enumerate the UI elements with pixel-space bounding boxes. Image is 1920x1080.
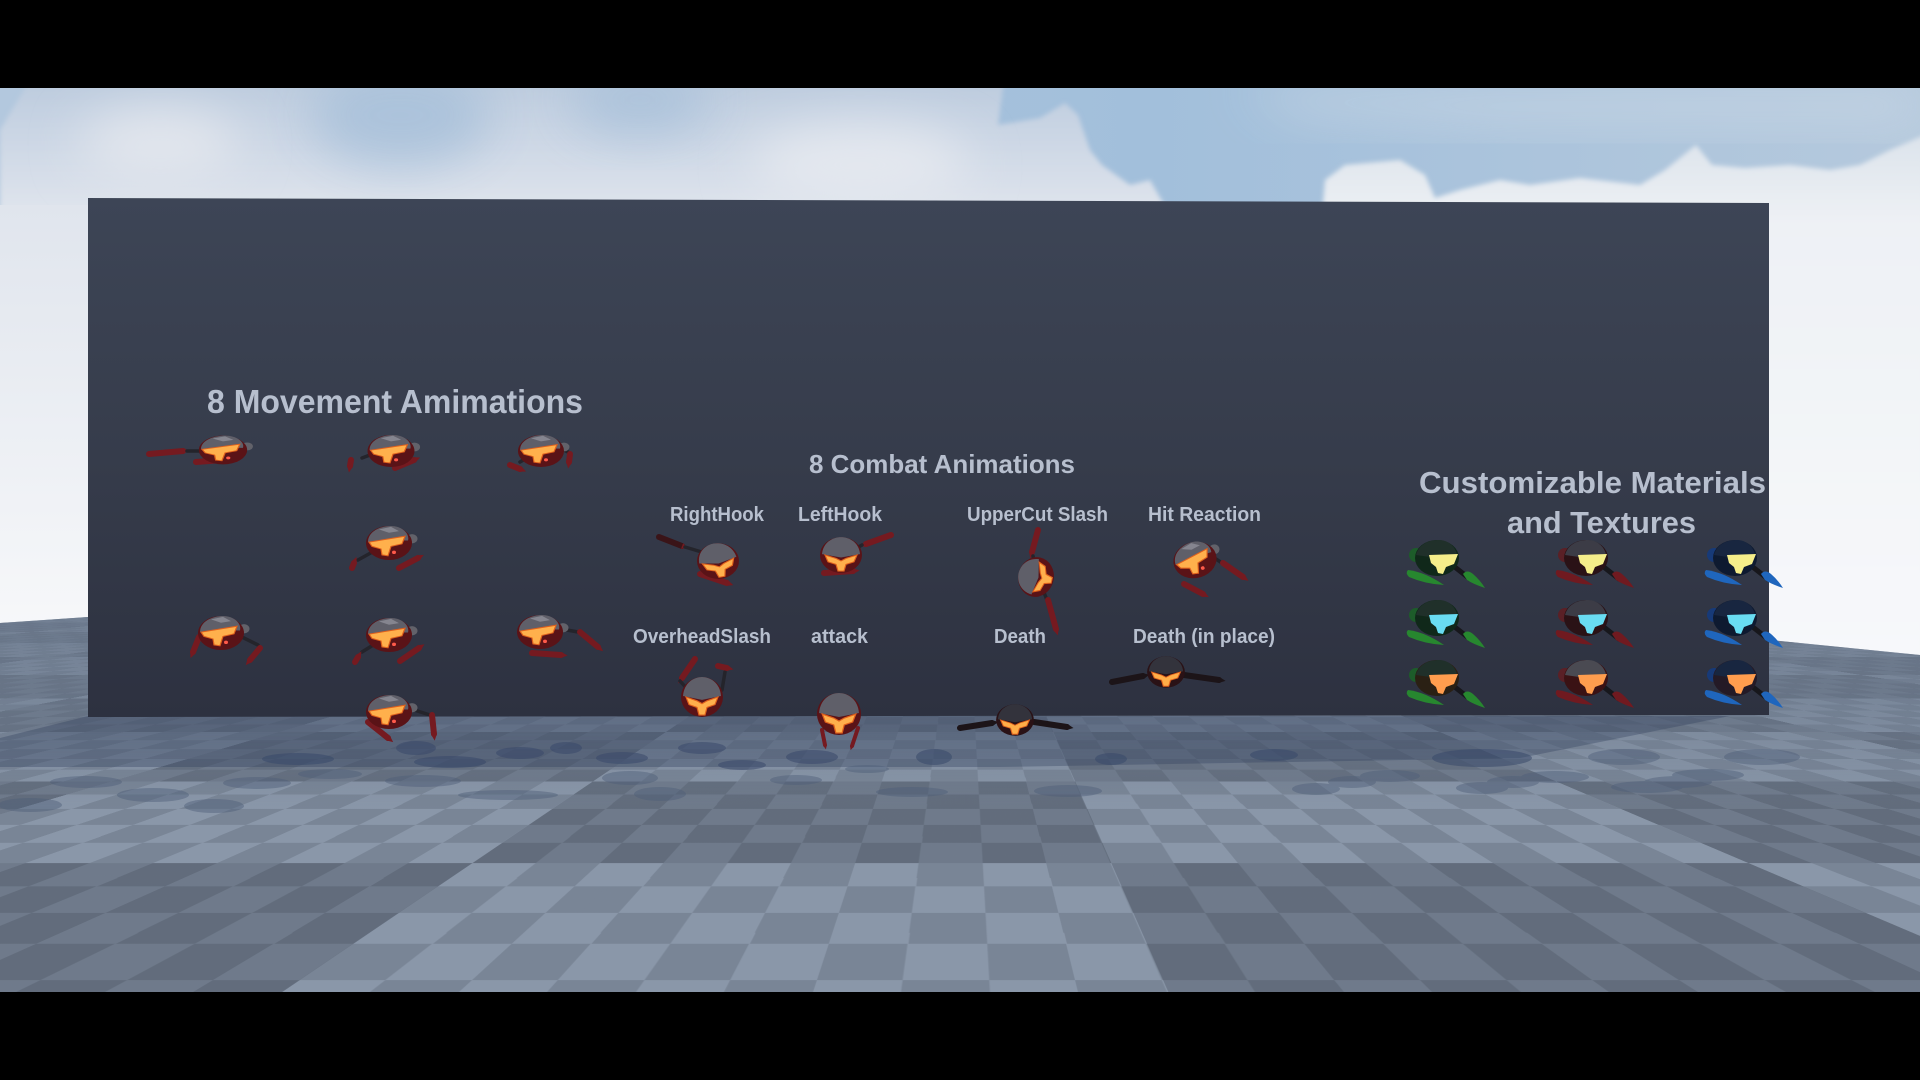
- robot: death in place: [1112, 656, 1219, 688]
- robot: movement 5: [193, 616, 260, 660]
- robot: right hook: [659, 537, 743, 583]
- robot: left hook: [820, 535, 891, 573]
- robot: blue yellow: [1705, 540, 1783, 588]
- robot: movement 7: [517, 615, 598, 655]
- robot: attack: [817, 693, 861, 746]
- label: LeftHook: LeftHook: [798, 504, 883, 526]
- robot: blue orange: [1705, 660, 1783, 708]
- label: Death: Death: [994, 626, 1046, 648]
- heading: and textures: and Textures: [1507, 505, 1696, 540]
- robot: uppercut slash: [1014, 530, 1058, 629]
- heading: combat animations: 8 Combat Animations: [809, 449, 1075, 479]
- robot: overhead slash: [680, 659, 727, 717]
- label: OverheadSlash: OverheadSlash: [633, 626, 771, 648]
- group: combat robots: [659, 530, 1243, 746]
- robot shadows on floor: [262, 741, 1532, 770]
- robot: green cyan: [1407, 600, 1485, 648]
- checkered floor: [0, 617, 1920, 992]
- robot: red cyan: [1556, 600, 1634, 648]
- robot: blue cyan: [1705, 600, 1783, 648]
- label: RightHook: RightHook: [670, 504, 765, 526]
- faint robot shadows on floor: [0, 749, 1800, 813]
- robot: red yellow: [1556, 540, 1634, 588]
- robot: red orange: [1556, 660, 1634, 708]
- robot: movement 4: [352, 526, 418, 568]
- wall shadow on floor: [0, 716, 1730, 767]
- heading: customizable materials: Customizable Materials: [1419, 465, 1766, 500]
- label: UpperCut Slash: UpperCut Slash: [967, 504, 1108, 526]
- robot: movement 3: [510, 435, 570, 469]
- robot: green yellow: [1407, 540, 1485, 588]
- robot: hit reaction: [1168, 535, 1243, 594]
- group: movement robots: [149, 435, 598, 738]
- heading: movement animations: 8 Movement Amimations: [207, 383, 583, 420]
- group: material variants: [1407, 540, 1783, 708]
- robot: movement 8: [366, 695, 434, 738]
- robot: green orange: [1407, 660, 1485, 708]
- label: attack: attack: [811, 626, 869, 648]
- back wall: [88, 198, 1769, 717]
- robot: death: [960, 704, 1067, 736]
- robot: movement 6: [355, 618, 419, 662]
- robot: movement 1: [149, 436, 253, 464]
- letterbox bar bottom: [0, 992, 1920, 1080]
- label: Hit Reaction: Hit Reaction: [1148, 504, 1261, 526]
- distant floor haze: [0, 617, 1920, 810]
- label: Death (in place): Death (in place): [1133, 626, 1275, 648]
- robot: movement 2: [350, 435, 420, 468]
- letterbox bar top: [0, 0, 1920, 88]
